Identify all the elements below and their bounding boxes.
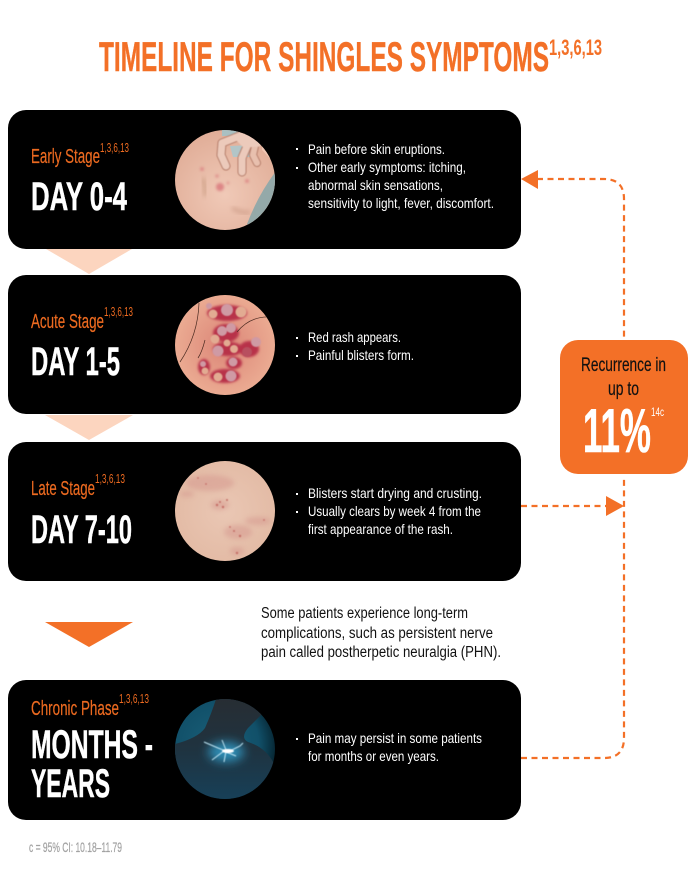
text block: long-term complications: complications, such as persistent nerve	[261, 625, 493, 642]
arrow: connector from acute to late stage	[45, 415, 133, 440]
timing: day 1-5: DAY 1-5	[31, 340, 120, 384]
symptoms list: early	[296, 141, 494, 211]
timing: day 0-4: DAY 0-4	[31, 175, 127, 219]
callout: recurrence rate: Recurrence in	[581, 355, 666, 376]
text block: long-term complications	[261, 605, 501, 661]
panel: chronic phase	[8, 680, 521, 820]
symptoms list: chronic: Pain may persist in some patients	[308, 730, 482, 746]
symptoms list: early: Other early symptoms: itching,	[308, 159, 466, 175]
arrow: late stage to recurrence line	[521, 496, 624, 516]
stage label: late: 1,3,6,13	[95, 471, 125, 486]
stage label: acute: 1,3,6,13	[104, 304, 133, 319]
stage label: late: Late Stage	[31, 478, 95, 500]
symptoms list: early: abnormal skin sensations,	[308, 177, 443, 193]
title: 1,3,6,13	[549, 35, 602, 60]
symptoms list: acute: Red rash appears.	[308, 329, 401, 345]
stage label: chronic: Chronic Phase	[31, 698, 119, 720]
stage label: chronic	[31, 691, 149, 720]
symptoms list: acute	[296, 329, 414, 363]
photo: hand scratching back	[175, 128, 276, 235]
timing: months - years: MONTHS -	[31, 723, 153, 767]
callout: recurrence rate: 14c	[651, 405, 664, 419]
timing: months - years: YEARS	[31, 762, 110, 806]
symptoms list: late	[296, 485, 482, 537]
arrow: progression to chronic phase	[45, 622, 133, 647]
symptoms list: late: Usually clears by week 4 from the	[308, 503, 481, 519]
callout: recurrence rate	[560, 340, 688, 474]
symptoms list: early: Pain before skin eruptions.	[308, 141, 445, 157]
text block: long-term complications: pain called postherpetic neuralgia (PHN).	[261, 644, 501, 661]
arrow: connector from early to acute stage	[46, 249, 132, 274]
timing: months - years	[31, 723, 153, 806]
arrow: chronic phase line up to recurrence box	[521, 478, 624, 758]
panel: early stage	[8, 110, 521, 249]
symptoms list: acute: Painful blisters form.	[308, 347, 414, 363]
stage label: acute: Acute Stage	[31, 311, 104, 333]
symptoms list: early: sensitivity to light, fever, discomfort.	[308, 195, 494, 211]
symptoms list: chronic	[296, 730, 482, 764]
callout: recurrence rate: up to	[608, 379, 639, 400]
timing: day 7-10: DAY 7-10	[31, 508, 132, 552]
photo: crusting rash	[175, 461, 275, 561]
stage label: early: Early Stage	[31, 146, 100, 168]
arrow: recurrence loop back to early stage	[521, 170, 624, 340]
text block: long-term complications: Some patients experience long-term	[261, 605, 468, 622]
panel: late stage	[8, 442, 521, 581]
photo: glowing nerve pain in shoulder	[175, 699, 276, 800]
panel: acute stage	[8, 275, 521, 414]
symptoms list: chronic: for months or even years.	[308, 748, 439, 764]
photo: red blisters	[175, 295, 275, 395]
stage label: early: 1,3,6,13	[100, 140, 129, 155]
symptoms list: late: first appearance of the rash.	[308, 521, 453, 537]
symptoms list: late: Blisters start drying and crusting.	[308, 485, 482, 501]
stage label: chronic: 1,3,6,13	[119, 691, 149, 706]
footnote: c = 95% CI: 10.18–11.79	[29, 839, 122, 855]
